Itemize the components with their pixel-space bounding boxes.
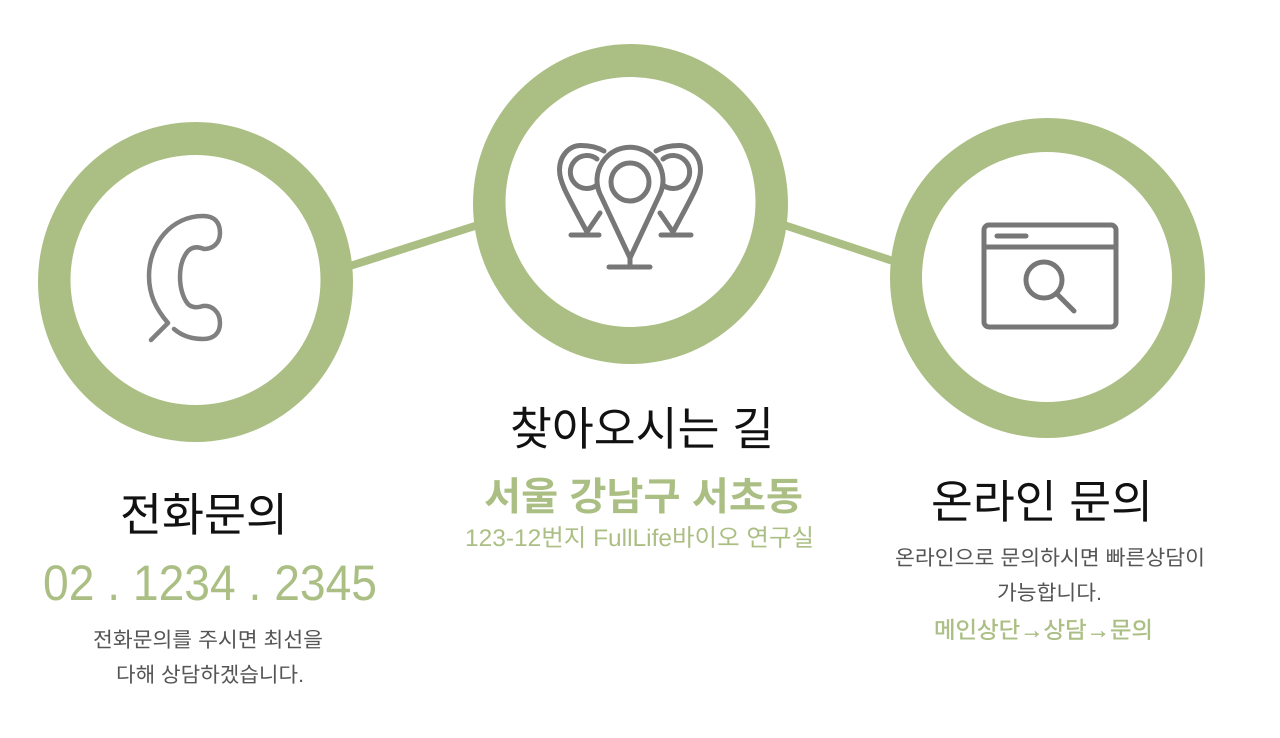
icon: phone handset: [149, 216, 220, 340]
online description: 온라인으로 문의하시면 빠른상담이: [895, 547, 1205, 570]
heading: phone inquiry: 전화문의: [120, 489, 288, 541]
panel: online inquiry: [890, 118, 1205, 643]
connector: phone to directions: [350, 225, 478, 266]
online description: [895, 547, 1205, 605]
phone number: 02 . 1234 . 2345: [43, 555, 377, 611]
phone description: [93, 629, 323, 687]
online description: 가능합니다.: [997, 582, 1102, 605]
directions ring: [473, 44, 788, 364]
phone description: 전화문의를 주시면 최선을: [93, 629, 323, 652]
address line two: 123-12번지 FullLife바이오 연구실: [465, 525, 814, 552]
phone ring: [38, 122, 353, 442]
online ring: [890, 118, 1205, 438]
icon: map pins: [560, 146, 700, 267]
connector: directions to online: [784, 225, 893, 261]
icon: browser search: [984, 225, 1116, 327]
online process steps: 메인상단→상담→문의: [934, 617, 1153, 643]
panel: directions: [465, 44, 814, 552]
panel: phone inquiry: [38, 122, 377, 687]
phone description: 다해 상담하겠습니다.: [116, 664, 304, 687]
address line one: 서울 강남구 서초동: [484, 476, 803, 519]
heading: directions: 찾아오시는 길: [510, 403, 774, 455]
heading: online inquiry: 온라인 문의: [931, 476, 1153, 528]
